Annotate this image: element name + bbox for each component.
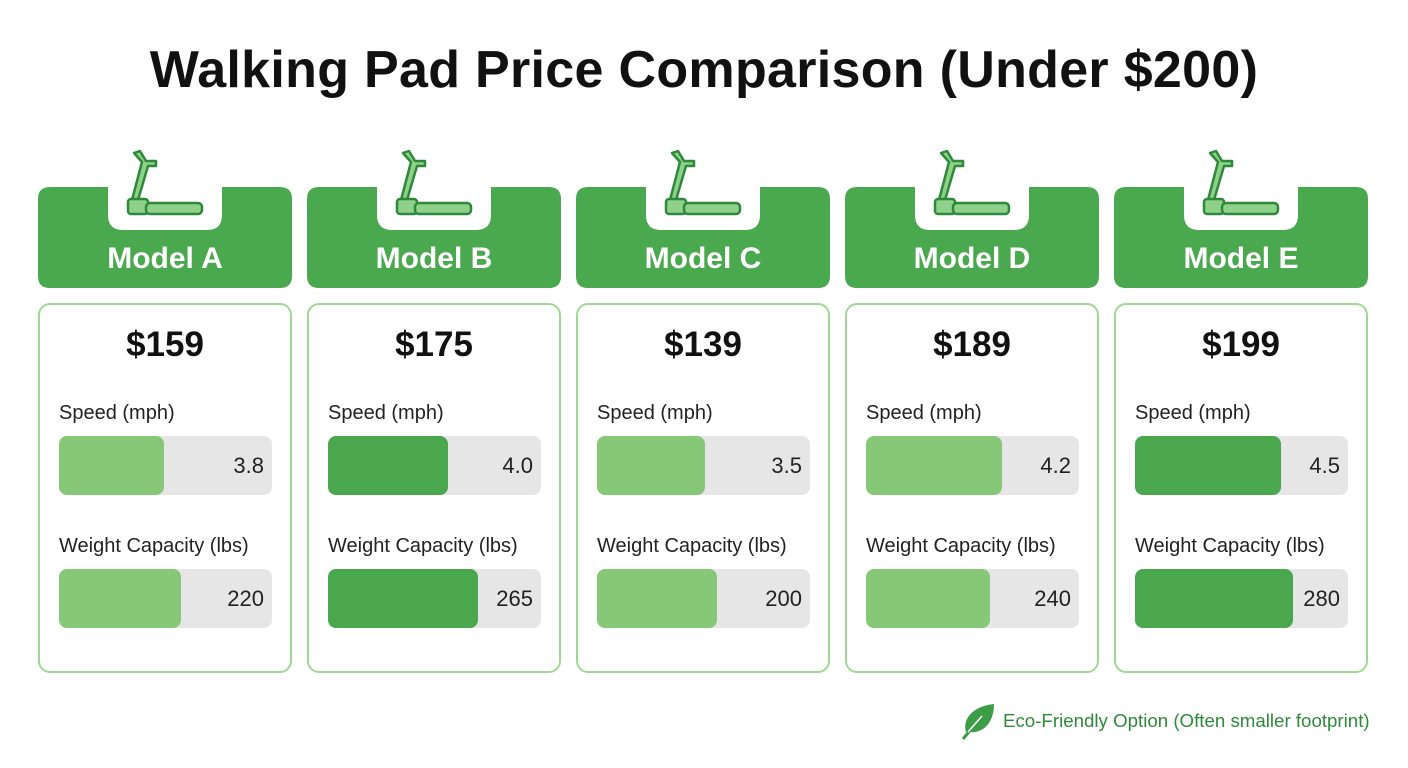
- bar: speed: 3.5: [771, 453, 802, 478]
- icon: treadmill: [934, 150, 1010, 216]
- panel: Model A: Weight Capacity (lbs): [59, 535, 249, 557]
- panel: Model E: $199: [1202, 325, 1280, 364]
- title: Walking Pad Price Comparison (Under $200): [150, 41, 1258, 99]
- bar: weight: [59, 569, 272, 628]
- panel: Model A: [38, 150, 292, 673]
- bar: speed: 4.5: [1309, 453, 1340, 478]
- bar: speed: [1135, 436, 1348, 495]
- panel: Model D: Model D: [914, 242, 1030, 275]
- panel: Model E: Speed (mph): [1135, 402, 1251, 424]
- header: Model B: [307, 187, 561, 288]
- bar: weight: 240: [1034, 586, 1071, 611]
- bar: speed: 3.8: [233, 453, 264, 478]
- icon: treadmill: [396, 150, 472, 216]
- panel: Model C: [576, 150, 830, 673]
- panel: Model E: Weight Capacity (lbs): [1135, 535, 1325, 557]
- header: Model E: [1114, 187, 1368, 288]
- icon: treadmill: [664, 150, 742, 216]
- panel: Model A: Speed (mph): [59, 402, 175, 424]
- panel: Model D: $189: [933, 325, 1011, 364]
- panel: Model A: Model A: [107, 242, 223, 275]
- bar: weight: [328, 569, 541, 628]
- panel: Model B: Weight Capacity (lbs): [328, 535, 518, 557]
- bar: speed: [328, 436, 541, 495]
- bar: speed: [59, 436, 272, 495]
- icon: treadmill: [126, 150, 204, 216]
- panel: Model C: Weight Capacity (lbs): [597, 535, 787, 557]
- panel: Model E: [1114, 150, 1368, 673]
- panel: Model C: Model C: [645, 242, 761, 275]
- panel: Model B: $175: [395, 325, 473, 364]
- bar: weight: [1135, 569, 1348, 628]
- bar: weight: [866, 569, 1079, 628]
- panel: Model B: Speed (mph): [328, 402, 444, 424]
- bar: speed: [597, 436, 810, 495]
- bar: weight: 220: [227, 586, 264, 611]
- panel: Model C: Speed (mph): [597, 402, 713, 424]
- panel: Model D: Weight Capacity (lbs): [866, 535, 1056, 557]
- panel: Model D: [845, 150, 1099, 673]
- header: Model C: [576, 187, 830, 288]
- panel: Model B: [307, 150, 561, 673]
- bar: speed: [866, 436, 1079, 495]
- panel: Model B: Model B: [376, 242, 492, 275]
- bar: speed: 4.0: [502, 453, 533, 478]
- bar: weight: 280: [1303, 586, 1340, 611]
- panel: Model D: Speed (mph): [866, 402, 982, 424]
- header: Model D: [845, 187, 1099, 288]
- panel: Model C: $139: [664, 325, 742, 364]
- icon: leaf: [962, 704, 994, 740]
- panel: Model E: Model E: [1183, 242, 1298, 275]
- legend: eco-friendly: Eco-Friendly Option (Often smaller footprint): [1003, 710, 1370, 731]
- legend: eco-friendly: [962, 704, 1370, 740]
- bar: weight: 265: [496, 586, 533, 611]
- panel: Model A: $159: [126, 325, 204, 364]
- icon: treadmill: [1202, 150, 1280, 216]
- header: Model A: [38, 187, 292, 288]
- bar: weight: [597, 569, 810, 628]
- bar: weight: 200: [765, 586, 802, 611]
- bar: speed: 4.2: [1040, 453, 1071, 478]
